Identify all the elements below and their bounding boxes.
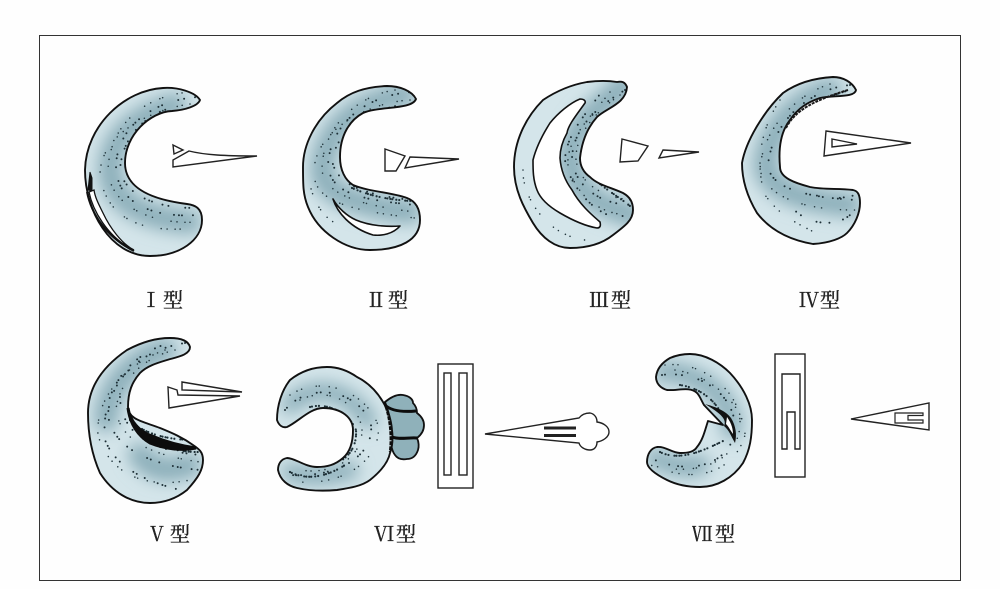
label VI: Ⅵ [374, 524, 394, 546]
label V: Ⅴ [147, 524, 167, 546]
label II: 型 [388, 289, 408, 312]
meniscus IV [738, 72, 864, 248]
label II: Ⅱ [366, 290, 386, 312]
diagram: rectangle VII [775, 354, 805, 477]
wedge VI [485, 413, 609, 450]
label IV: Ⅳ [799, 290, 819, 312]
wedge VII [851, 403, 929, 430]
meniscus VI [274, 364, 424, 494]
panel: type III [510, 75, 699, 312]
panel: type II [300, 80, 459, 312]
panel: type VII [644, 350, 929, 546]
diagram: rectangle VI [438, 364, 473, 488]
label III: Ⅲ [589, 290, 609, 312]
panel: type VI [274, 364, 609, 546]
panel: type I [80, 80, 257, 312]
label VII: Ⅶ [692, 524, 712, 546]
panel: type V [84, 335, 242, 546]
meniscus III [513, 80, 634, 249]
lobes [385, 395, 424, 459]
panel: type IV [738, 72, 911, 312]
wedge IV [824, 131, 911, 156]
wedge V [168, 382, 242, 408]
label VI: 型 [396, 523, 416, 546]
label VII: 型 [715, 523, 735, 546]
meniscus VII [644, 350, 756, 490]
label I: Ⅰ [141, 290, 161, 312]
wedge III [620, 139, 699, 162]
label III: 型 [611, 289, 631, 312]
meniscus II [300, 80, 425, 255]
wedge I [173, 145, 257, 167]
meniscus I [84, 86, 203, 257]
label I: 型 [163, 289, 183, 312]
label V: 型 [170, 523, 190, 546]
label IV: 型 [820, 289, 840, 312]
wedge II [385, 149, 459, 171]
meniscus V [84, 335, 206, 507]
